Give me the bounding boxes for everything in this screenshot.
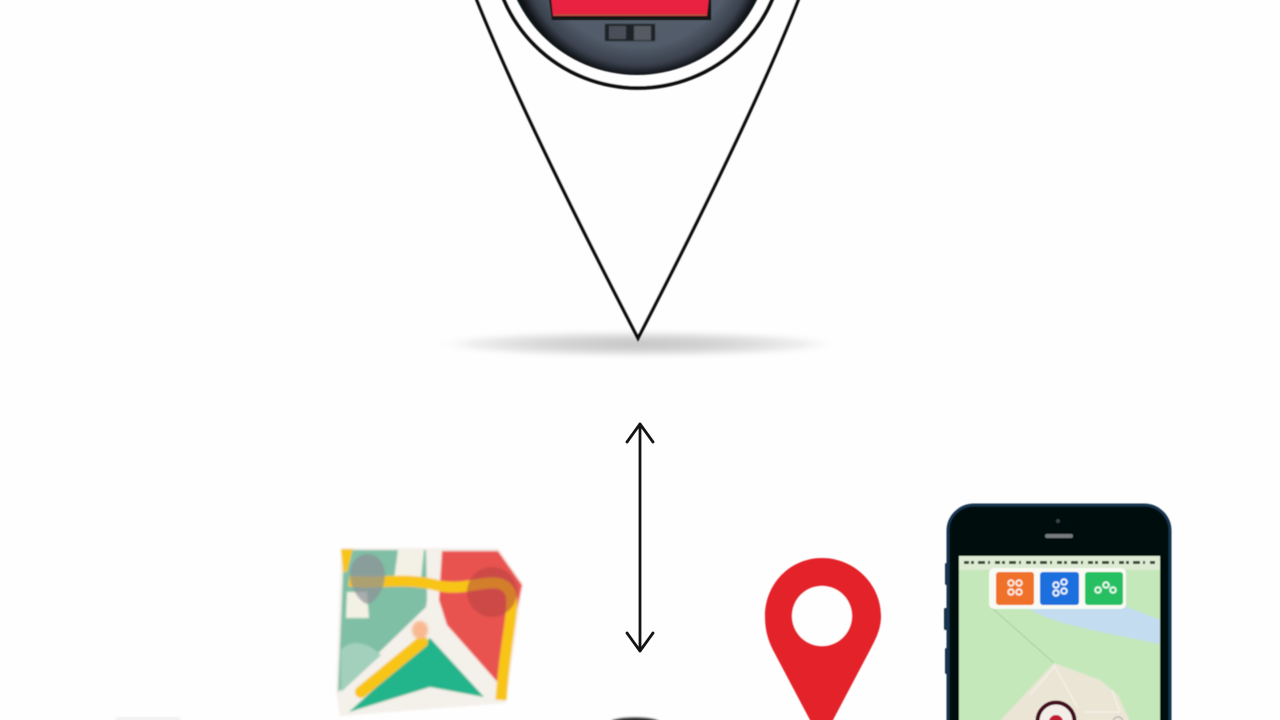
pin ring (492, 0, 784, 88)
green park area (338, 550, 427, 692)
pale hill (341, 643, 381, 692)
orange junction (412, 621, 428, 639)
pin body (476, 0, 799, 338)
red waypoint shadow (467, 567, 517, 617)
speaker (1045, 534, 1073, 538)
map paper (336, 548, 523, 716)
smartphone (944, 505, 1170, 720)
side buttons (944, 563, 949, 674)
grey waypoint (350, 554, 385, 604)
river (1028, 606, 1160, 644)
orange app (996, 572, 1034, 605)
pale blocks (394, 550, 424, 579)
status bar (959, 556, 1160, 570)
small grey ring (1113, 717, 1123, 720)
blue app (1040, 572, 1079, 605)
thin road (992, 608, 1054, 663)
pale streets (1030, 665, 1120, 712)
red map marker (765, 558, 881, 720)
tan district (995, 663, 1132, 720)
large location pin outline (430, 0, 846, 358)
pin dark disc (504, 0, 770, 75)
camera (1056, 519, 1060, 523)
status bar glyphs (964, 561, 1156, 564)
yellow corner (341, 549, 353, 572)
pin soft inner shadow (483, 0, 793, 330)
target marker (1038, 702, 1074, 720)
green app (1085, 572, 1123, 605)
red area (439, 551, 522, 685)
teal triangle (349, 638, 484, 712)
white card (989, 568, 1126, 609)
yellow route (349, 581, 512, 700)
dark object at bottom edge (611, 718, 659, 720)
map screen (959, 556, 1160, 720)
folded map icon (336, 548, 523, 716)
device buttons (605, 24, 655, 41)
phone body (948, 505, 1170, 720)
double-headed vertical arrow (627, 424, 653, 651)
pin ground shadow (430, 330, 846, 358)
faint object at bottom left (116, 717, 180, 720)
red device screen (549, 0, 711, 20)
